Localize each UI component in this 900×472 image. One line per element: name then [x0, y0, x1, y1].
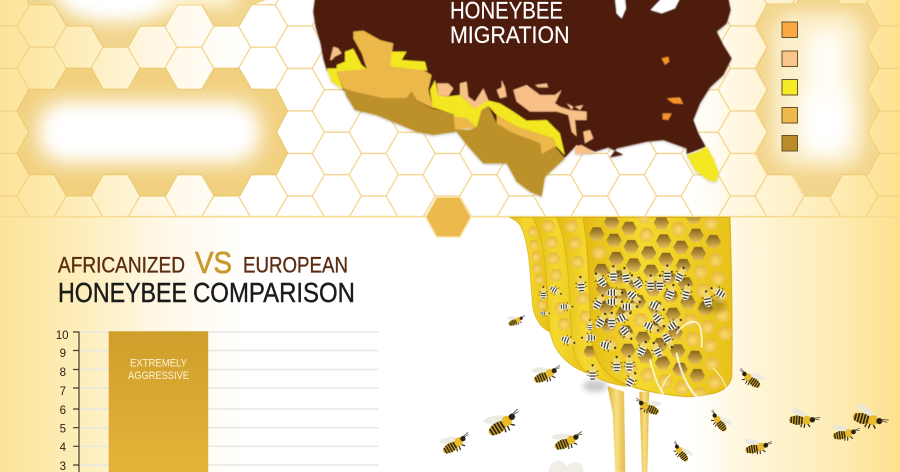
honeycomb hexagon grid — [0, 0, 900, 218]
comparison heading: VS — [195, 245, 232, 280]
region: dark gold — [343, 88, 565, 197]
illustration: honeycomb with bees — [437, 203, 891, 472]
comparison heading: COMPARISON — [193, 277, 355, 308]
chart axis labels: 8 — [60, 367, 66, 379]
comb shadow under bee cluster — [701, 298, 726, 312]
bar label: AGGRESSIVE — [128, 370, 189, 382]
comparison heading: HONEYBEE — [58, 277, 187, 308]
chart axis labels: 6 — [60, 405, 66, 417]
map great lakes — [615, 0, 680, 18]
gold hexagon marker — [426, 197, 471, 237]
region: peach — [330, 47, 595, 154]
chart axis labels: 9 — [60, 348, 66, 360]
comparison heading: AFRICANIZED — [58, 253, 185, 278]
map land — [313, 0, 732, 157]
chart axis labels: 10 — [56, 330, 68, 342]
map title: MIGRATION — [450, 22, 570, 49]
map title — [450, 0, 570, 49]
map: United States honeybee migration — [313, 0, 732, 197]
region: yellow — [327, 49, 718, 182]
faint wings at bottom edge — [549, 461, 584, 472]
bar label: EXTREMELY — [130, 358, 188, 370]
honey drips — [583, 380, 649, 472]
comb layer 3 — [557, 217, 628, 387]
bar label — [128, 358, 189, 382]
chart axis labels: 5 — [60, 424, 66, 436]
honey highlights — [650, 322, 727, 397]
colony bees — [539, 264, 728, 390]
panel: upper left blurred hexagon panel — [28, 0, 278, 47]
region: mid gold — [337, 31, 557, 154]
comparison heading: EUROPEAN — [243, 253, 348, 278]
bar chart: aggression — [56, 330, 379, 472]
bar: extremely aggressive — [109, 331, 208, 472]
region: orange — [662, 57, 683, 120]
comb layer 2 — [533, 217, 588, 373]
panel: middle left blurred hexagon panel — [17, 68, 288, 196]
panel: right legend blurred hexagon panel — [757, 0, 879, 196]
chart axis labels: 7 — [60, 386, 66, 398]
chart grid lines — [79, 332, 379, 465]
comb layer 1 — [509, 217, 549, 332]
comparison heading — [58, 245, 355, 308]
chart axis labels: 4 — [60, 442, 67, 454]
flying bees — [437, 310, 891, 464]
chart axis labels — [56, 330, 68, 472]
legend swatches — [782, 22, 798, 151]
comb layer 4 main — [583, 203, 733, 401]
chart axis — [73, 332, 79, 472]
